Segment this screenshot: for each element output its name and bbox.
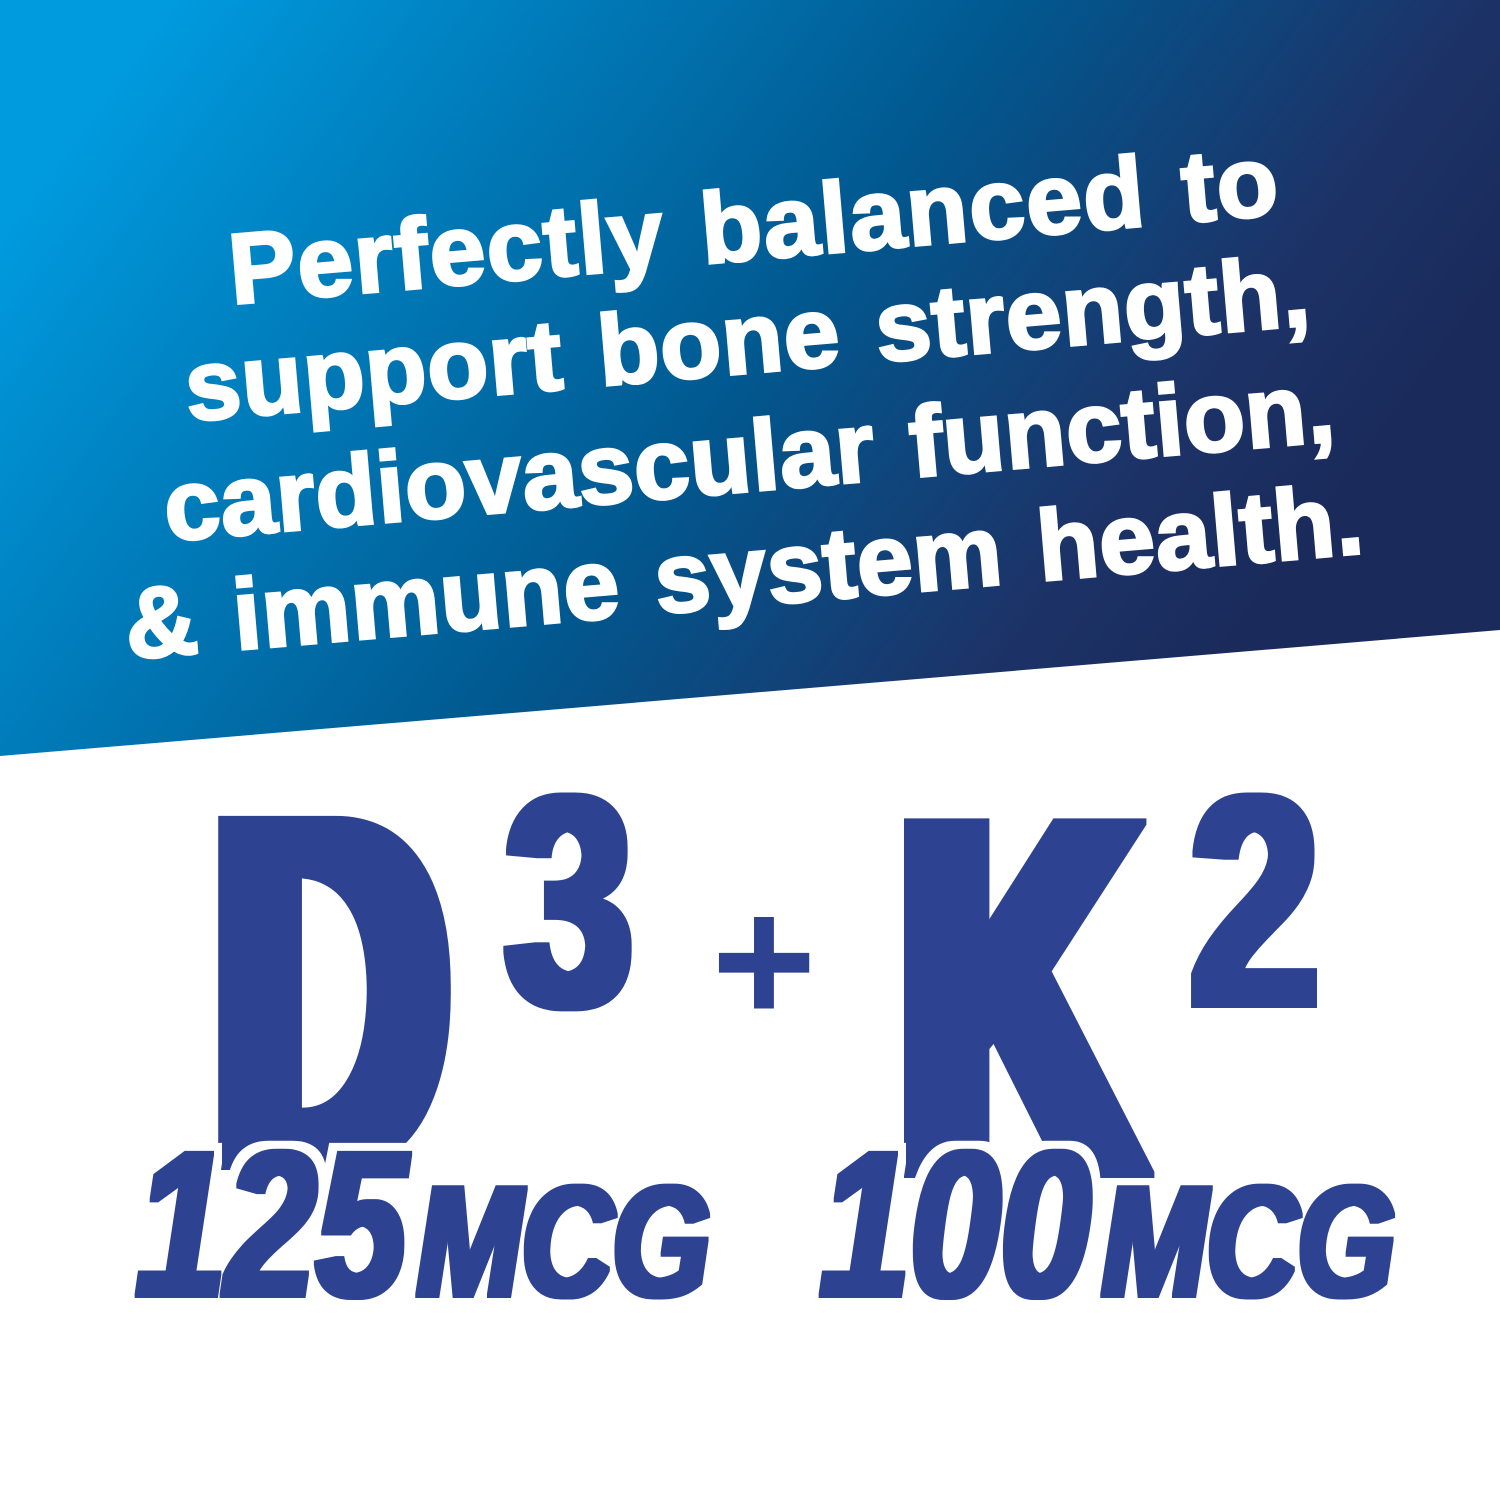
vitamin K2 letter: K xyxy=(901,710,1139,1285)
dose: 100 mcg: 100 xyxy=(820,1107,1090,1341)
vitamin D3 letter: D xyxy=(216,710,445,1275)
dose: 125 mcg xyxy=(136,1107,710,1341)
dose: 125 mcg: MCG xyxy=(417,1154,710,1330)
dose: 100 mcg: MCG xyxy=(1102,1154,1395,1330)
vitamin D3 letter: 3 xyxy=(505,733,633,1069)
dose: 125 mcg: 125 xyxy=(136,1107,408,1341)
vitamin D3 letter xyxy=(216,710,633,1275)
vitamin K2 letter: 2 xyxy=(1190,733,1319,1069)
heading: slanted benefit statement: Perfectly balanced to xyxy=(224,124,1282,326)
heading: slanted benefit statement xyxy=(120,124,1367,681)
heading: slanted benefit statement: support bone strength, xyxy=(180,235,1314,443)
vitamin K2 letter xyxy=(901,710,1319,1285)
plus sign: + xyxy=(711,861,817,1062)
panel: gradient banner xyxy=(0,0,1500,756)
dose: 100 mcg xyxy=(820,1107,1395,1341)
heading: slanted benefit statement: cardiovascular function, xyxy=(159,351,1339,563)
heading: slanted benefit statement: & immune system health. xyxy=(120,463,1367,681)
